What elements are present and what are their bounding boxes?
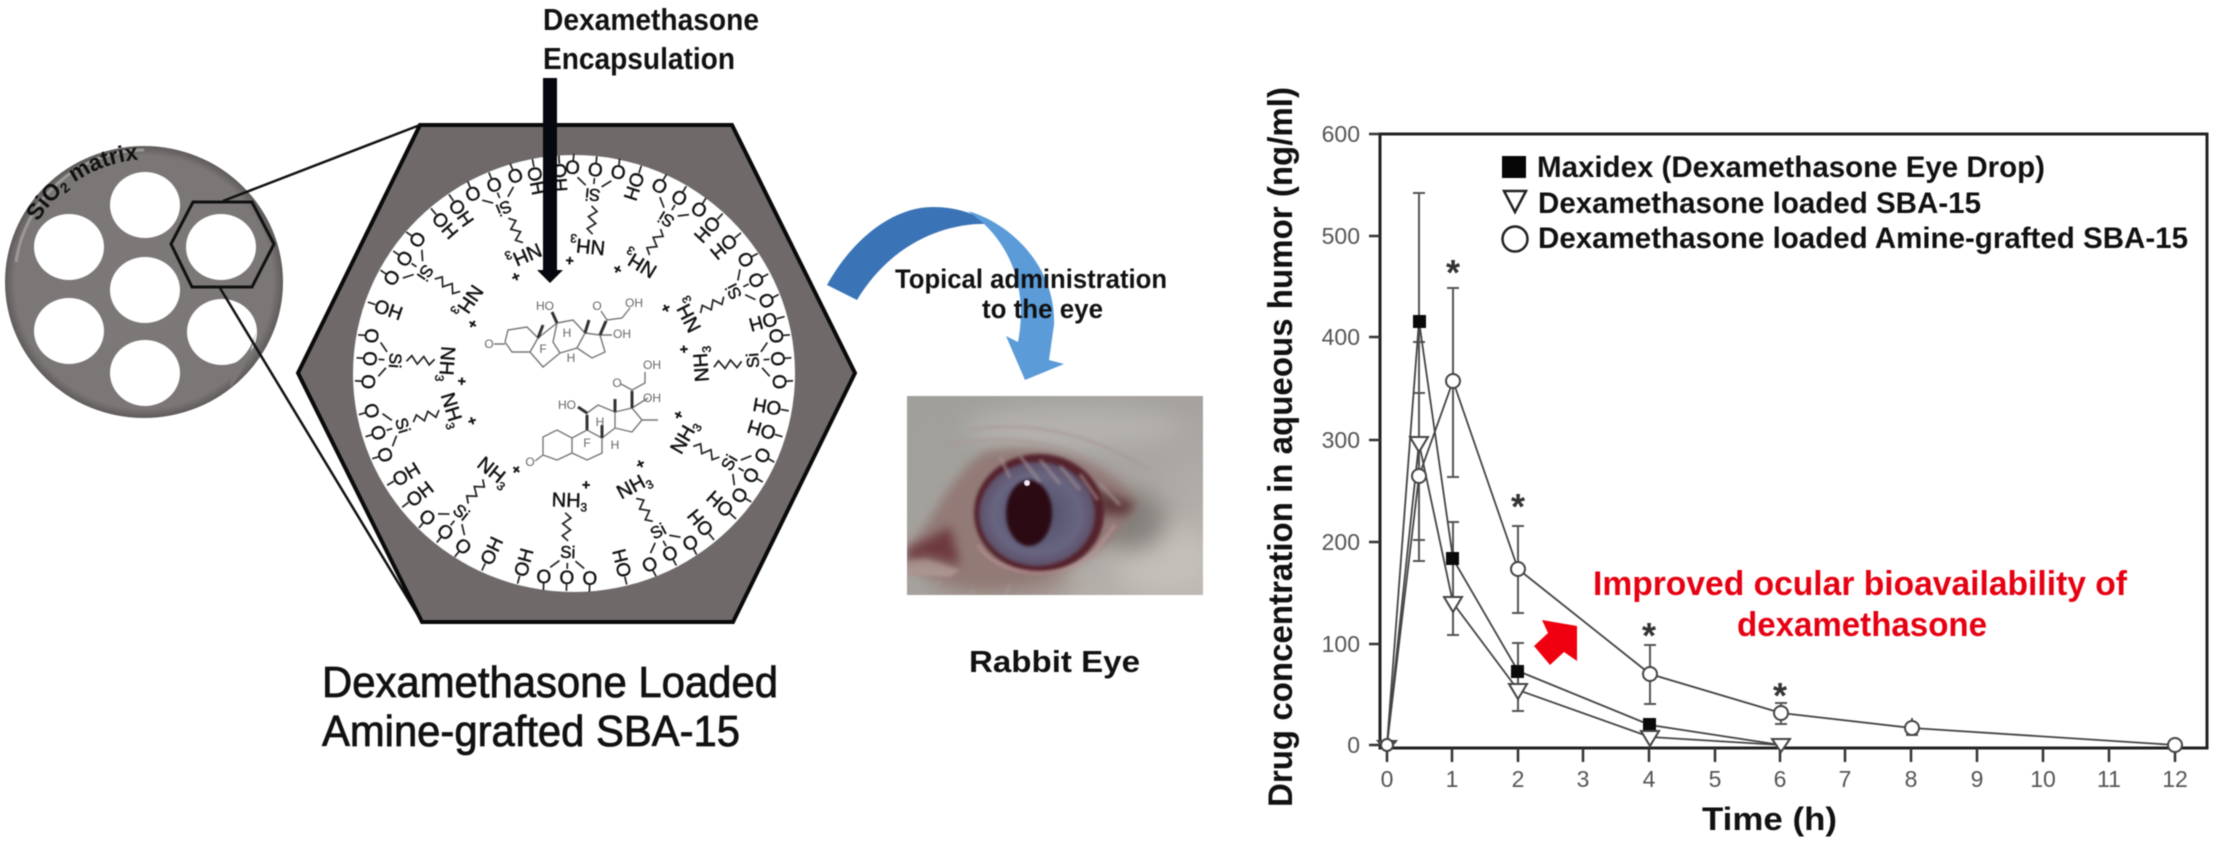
amine-grafted surface groups: + — [582, 476, 590, 493]
amine-grafted surface groups: 3 — [502, 248, 514, 263]
amine-grafted surface groups: OH — [751, 393, 783, 418]
zoom lines from pore to large hexagon — [220, 125, 422, 622]
dexamethasone molecule: lower: H — [611, 438, 619, 452]
amine-grafted surface groups: O — [432, 520, 457, 546]
amine-grafted surface groups: O — [755, 289, 780, 312]
amine-grafted surface groups: NH — [666, 422, 700, 458]
amine-grafted surface groups: Si — [449, 500, 473, 525]
label: SiO2 matrix: matrix — [69, 144, 138, 182]
amine-grafted surface groups: O — [365, 423, 390, 443]
chart frame and axes — [1380, 134, 2207, 748]
amine-grafted surface groups: O — [744, 268, 770, 291]
text: topical administration to the eye: to the eye — [982, 294, 1103, 324]
dexamethasone molecule: upper: HO — [536, 299, 554, 313]
amine-grafted surface groups: O — [766, 328, 788, 344]
amine-grafted surface groups: + — [657, 301, 675, 316]
series: Dexamethasone loaded Amine-grafted SBA-15 — [1381, 374, 2182, 752]
amine-grafted surface groups: O — [360, 328, 382, 344]
significance asterisks: * — [1642, 615, 1656, 656]
amine-grafted surface groups: 3 — [679, 293, 695, 305]
amine-grafted surface groups: Si — [743, 352, 763, 369]
amine-grafted surface groups: O — [648, 172, 672, 198]
callout: improved ocular bioavailability — [1534, 565, 2128, 665]
amine-grafted surface groups: 3 — [580, 500, 588, 515]
amine-grafted surface groups: OH — [403, 478, 438, 512]
photo: rabbit eye — [907, 396, 1215, 598]
amine-grafted surface groups: Si — [413, 261, 437, 284]
amine-grafted surface groups: 3 — [699, 345, 714, 353]
amine-grafted surface groups: OH — [444, 196, 477, 231]
y-axis ticks and labels: 600 — [1322, 121, 1360, 147]
amine-grafted surface groups: + — [675, 345, 692, 354]
amine-grafted surface groups: 3 — [447, 303, 463, 317]
amine-grafted surface groups: O — [768, 351, 790, 367]
amine-grafted surface groups: O — [639, 553, 662, 578]
amine-grafted surface groups: + — [610, 261, 625, 279]
amine-grafted surface groups: OH — [746, 307, 779, 335]
amine-grafted surface groups: NH — [551, 489, 581, 512]
amine-grafted surface groups: O — [610, 160, 627, 182]
x-axis title: Time (h) — [1702, 801, 1837, 837]
amine-grafted surface groups: OH — [389, 459, 424, 492]
amine-grafted surface groups: OH — [511, 546, 539, 579]
title: Dexamethasone Loaded Amine-grafted SBA-15: Amine-grafted SBA-15 — [322, 707, 740, 756]
y-axis ticks and labels: 300 — [1322, 427, 1360, 453]
amine-grafted surface groups: O — [559, 568, 575, 589]
y-axis ticks and labels — [1322, 121, 1380, 758]
amine-grafted surface groups: NH — [435, 346, 459, 376]
legend: Dexamethasone loaded Amine-grafted SBA-15 — [1538, 222, 2188, 255]
amine-grafted surface groups: Si — [493, 196, 515, 219]
x-axis ticks and labels: 7 — [1839, 766, 1851, 792]
dexamethasone molecule: lower: HO — [558, 398, 576, 412]
label: Rabbit Eye: Rabbit Eye — [969, 644, 1140, 679]
callout: improved ocular bioavailability: dexamethasone — [1737, 606, 1987, 644]
amine-grafted surface groups: + — [669, 407, 687, 422]
amine-grafted surface groups: Si — [647, 520, 669, 543]
x-axis ticks and labels: 3 — [1577, 766, 1589, 792]
panel: enlarged pore hexagon — [298, 125, 855, 622]
amine-grafted surface groups: O — [404, 227, 429, 251]
amine-grafted surface groups: O — [679, 531, 702, 556]
amine-grafted surface groups: Si — [391, 415, 414, 435]
amine-grafted surface groups: O — [728, 484, 753, 507]
x-axis ticks and labels: 10 — [2030, 766, 2056, 792]
amine-grafted surface groups: Si — [655, 207, 678, 231]
error bars — [1413, 193, 1918, 735]
dexamethasone molecule: upper: H — [563, 326, 571, 340]
amine-grafted surface groups: O — [668, 184, 692, 210]
amine-grafted surface groups: Si — [722, 280, 746, 303]
x-axis ticks and labels: 4 — [1643, 766, 1656, 792]
amine-grafted surface groups: O — [356, 374, 378, 390]
x-axis ticks and labels: 11 — [2097, 766, 2121, 792]
dexamethasone molecule: lower: OH — [643, 358, 661, 372]
amine-grafted surface groups: O — [688, 196, 711, 222]
text: topical administration to the eye: Topical administration — [895, 264, 1167, 294]
amine-grafted surface groups: O — [358, 351, 380, 367]
amine-grafted surface groups: NH — [575, 234, 606, 259]
amine-grafted surface groups: O — [770, 374, 792, 390]
x-axis ticks and labels: 5 — [1709, 766, 1721, 792]
amine-grafted surface groups: O — [391, 246, 416, 270]
dexamethasone molecule: lower: O — [612, 376, 622, 390]
series: Maxidex — [1387, 315, 1781, 745]
amine-grafted surface groups: Si — [385, 352, 405, 369]
amine-grafted surface groups: NH — [673, 300, 706, 336]
title: Dexamethasone Loaded Amine-grafted SBA-15: Dexamethasone Loaded — [322, 658, 778, 707]
amine-grafted surface groups: O — [751, 444, 776, 467]
amine-grafted surface groups: OH — [706, 229, 741, 263]
heading: Dexamethasone Encapsulation: Encapsulation — [543, 41, 735, 76]
y-axis title: Drug concentration in aqueous humor (ng/ml) — [1262, 87, 1300, 807]
amine-grafted surface groups: OH — [477, 534, 508, 569]
dexamethasone molecule: lower: H — [596, 415, 604, 429]
label: SiO2 matrix: SiO — [26, 183, 60, 220]
amine-grafted surface groups: 3 — [494, 479, 508, 494]
x-axis ticks and labels — [1381, 748, 2188, 792]
chart: drug concentration in aqueous humor — [1262, 87, 2207, 837]
amine-grafted surface groups: Si — [560, 543, 576, 562]
amine-grafted surface groups: + — [633, 455, 648, 472]
series: Dexamethasone loaded SBA-15 — [1378, 437, 1790, 752]
x-axis ticks and labels: 6 — [1774, 766, 1786, 792]
amine-grafted surface groups: O — [536, 567, 552, 588]
amine-grafted surface groups: OH — [703, 486, 738, 520]
amine-grafted surface groups: 3 — [432, 374, 447, 382]
amine-grafted surface groups: Si — [584, 184, 601, 205]
significance asterisks — [1446, 252, 1787, 716]
amine-grafted surface groups: + — [508, 461, 525, 478]
dexamethasone molecule: lower — [525, 358, 661, 469]
amine-grafted surface groups: NH — [436, 390, 465, 424]
amine-grafted surface groups: 3 — [442, 421, 458, 432]
amine-grafted surface groups — [354, 153, 794, 592]
amine-grafted surface groups: + — [464, 316, 482, 332]
significance asterisks: * — [1446, 252, 1460, 293]
amine-grafted surface groups: NH — [613, 471, 649, 504]
amine-grafted surface groups: 3 — [569, 231, 578, 246]
arrow: red upward arrow — [1534, 620, 1577, 665]
callout: improved ocular bioavailability: Improved ocular bioavailability of — [1593, 565, 2128, 603]
amine-grafted surface groups: O — [504, 162, 526, 187]
amine-grafted surface groups: O — [414, 505, 439, 531]
amine-grafted surface groups: O — [359, 401, 383, 421]
x-axis ticks and labels: 1 — [1446, 766, 1458, 792]
x-axis ticks and labels: 2 — [1512, 766, 1524, 792]
amine-grafted surface groups: O — [659, 542, 682, 567]
dexamethasone molecule: lower: O — [525, 455, 535, 469]
amine-grafted surface groups: OH — [371, 296, 405, 325]
x-axis ticks and labels: 9 — [1971, 766, 1983, 792]
amine-grafted surface groups: 3 — [624, 243, 637, 258]
heading: Dexamethasone Encapsulation: Dexamethasone — [543, 2, 759, 37]
amine-grafted surface groups: NH — [453, 281, 487, 317]
amine-grafted surface groups: O — [582, 568, 598, 590]
amine-grafted surface groups: + — [509, 268, 523, 286]
amine-grafted surface groups: OH — [745, 415, 779, 443]
dexamethasone molecule: upper: O — [484, 337, 494, 351]
amine-grafted surface groups: O — [739, 464, 765, 487]
dexamethasone molecule: upper: F — [539, 342, 547, 356]
amine-grafted surface groups: O — [378, 265, 404, 289]
amine-grafted surface groups: OH — [522, 165, 548, 197]
amine-grafted surface groups: NH — [690, 352, 714, 383]
amine-grafted surface groups: O — [587, 157, 604, 180]
icon: SiO2 matrix porous disc — [4, 144, 284, 419]
label: SiO2 matrix: 2 — [60, 182, 71, 194]
significance asterisks: * — [1773, 675, 1787, 716]
amine-grafted surface groups: O — [462, 180, 483, 205]
dexamethasone molecule: lower: OH — [643, 391, 661, 405]
y-axis ticks and labels: 200 — [1322, 529, 1360, 555]
x-axis ticks and labels: 0 — [1381, 766, 1393, 792]
amine-grafted surface groups: + — [454, 377, 470, 386]
amine-grafted surface groups: OH — [427, 208, 462, 244]
amine-grafted surface groups: O — [372, 445, 396, 465]
amine-grafted surface groups: OH — [609, 546, 637, 579]
y-axis ticks and labels: 100 — [1322, 631, 1360, 657]
dexamethasone molecule: lower: F — [583, 436, 591, 450]
x-axis ticks and labels: 8 — [1905, 766, 1917, 792]
amine-grafted surface groups: + — [565, 253, 575, 269]
amine-grafted surface groups: 3 — [643, 477, 656, 492]
legend: Maxidex (Dexamethasone Eye Drop) — [1537, 151, 2045, 184]
y-axis ticks and labels: 400 — [1322, 324, 1360, 350]
x-axis ticks and labels: 12 — [2162, 766, 2188, 792]
arrow: curved blue administration arrow — [827, 207, 1064, 380]
amine-grafted surface groups: OH — [619, 169, 648, 203]
amine-grafted surface groups: + — [464, 415, 481, 427]
amine-grafted surface groups: O — [564, 155, 581, 177]
amine-grafted surface groups: O — [483, 171, 505, 196]
amine-grafted surface groups: OH — [684, 505, 718, 540]
dexamethasone molecule: upper: H — [567, 351, 575, 365]
dexamethasone molecule: upper: OH — [625, 296, 643, 310]
arrow: dexamethasone encapsulation — [537, 78, 563, 283]
y-axis ticks and labels: 0 — [1347, 732, 1360, 758]
dexamethasone molecule: upper: O — [592, 299, 602, 313]
amine-grafted surface groups: Si — [717, 451, 741, 474]
amine-grafted surface groups: NH — [625, 248, 661, 282]
amine-grafted surface groups: OH — [689, 211, 724, 246]
amine-grafted surface groups: NH — [509, 238, 545, 270]
amine-grafted surface groups: O — [734, 248, 759, 271]
dexamethasone molecule: upper — [484, 296, 643, 367]
significance asterisks: * — [1511, 486, 1525, 527]
legend: Dexamethasone loaded SBA-15 — [1538, 187, 1981, 220]
amine-grafted surface groups: 3 — [690, 421, 705, 434]
small selection hexagon — [171, 202, 274, 287]
legend — [1502, 151, 2188, 255]
amine-grafted surface groups: O — [450, 534, 475, 560]
amine-grafted surface groups: NH — [473, 453, 509, 488]
amine-grafted surface groups: OH — [547, 163, 570, 193]
y-axis ticks and labels: 500 — [1322, 223, 1360, 249]
dexamethasone molecule: upper: OH — [613, 327, 631, 341]
